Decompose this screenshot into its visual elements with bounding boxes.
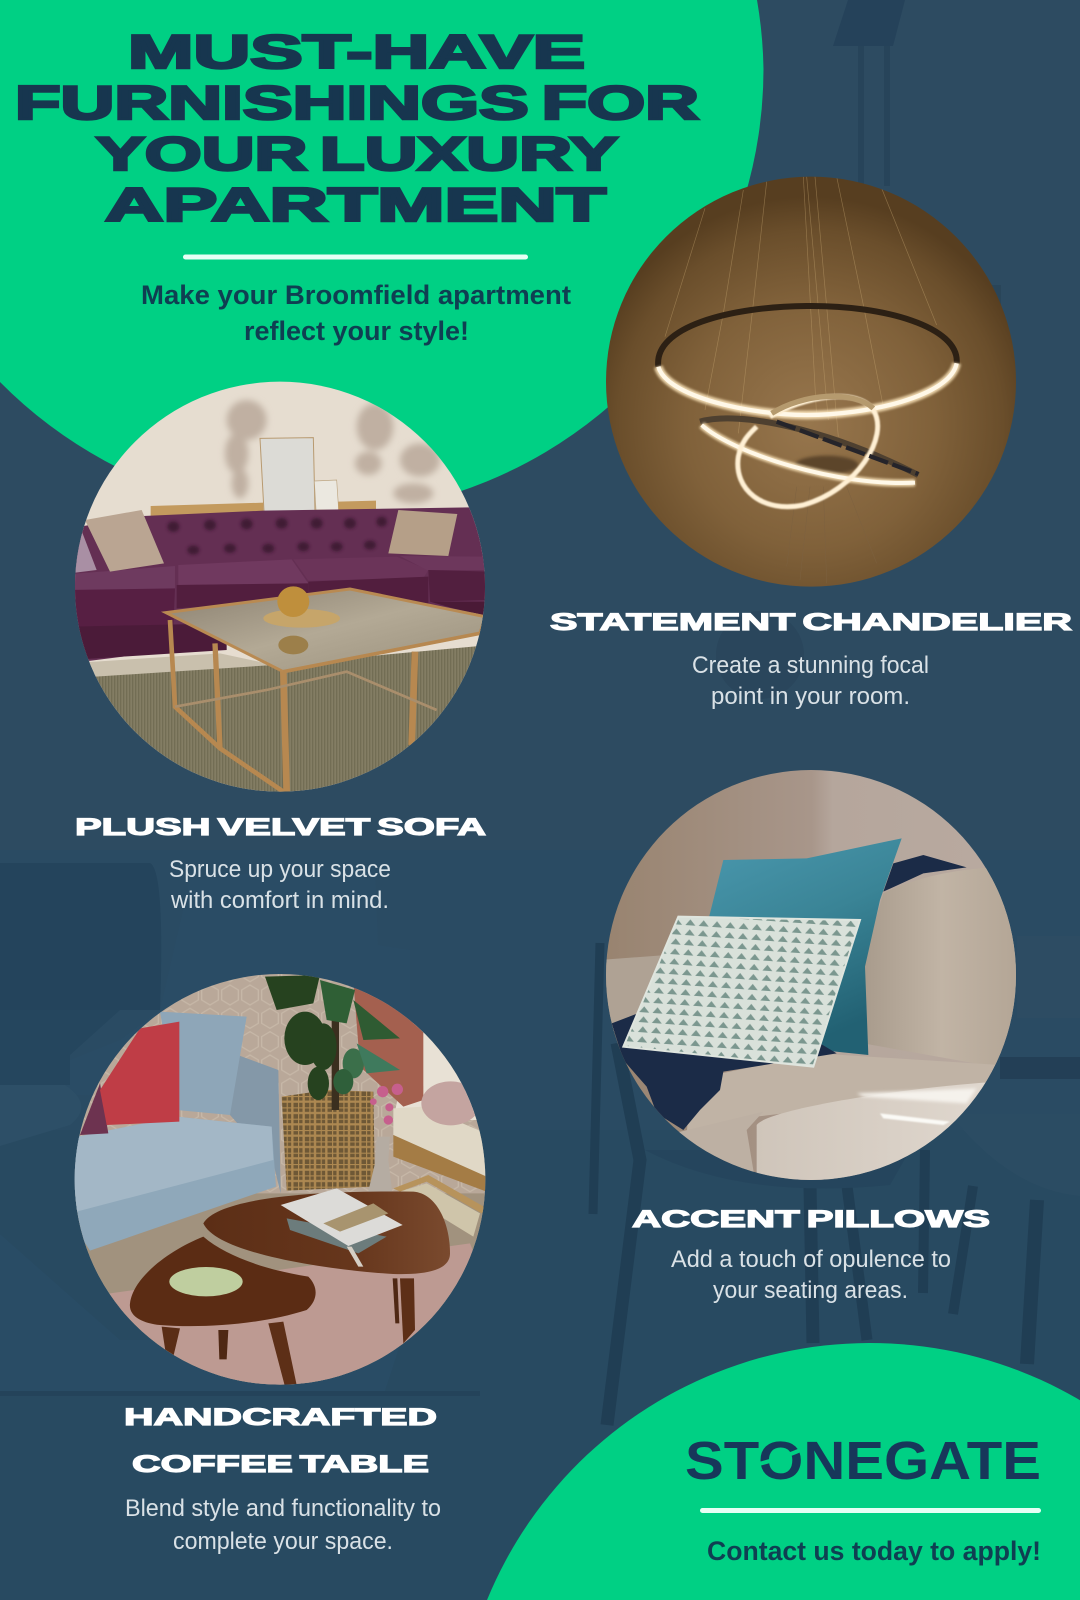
heading: plush velvet sofa: PLUSH VELVET SOFA: [75, 814, 486, 841]
throw pillows: [85, 510, 457, 572]
heading: statement chandelier: STATEMENT CHANDELIER: [550, 609, 1072, 636]
heading: handcrafted coffee table: COFFEE TABLE: [132, 1451, 429, 1478]
text: chandelier description: [692, 652, 929, 710]
woven basket: [282, 1090, 375, 1191]
patterned pillow: [623, 917, 860, 1067]
floor and rug: [90, 646, 476, 792]
title: MUST-HAVE: [128, 25, 585, 78]
panel: bottom green circle: [487, 1343, 1080, 1600]
sofa: [600, 867, 1020, 1190]
text: chandelier description: point in your room.: [711, 683, 910, 710]
lamp silhouette: [833, 0, 905, 46]
photo: handcrafted coffee table: [70, 970, 493, 1393]
rug silhouette: [0, 1234, 400, 1391]
subtitle: Make your Broomfield apartment: [141, 280, 571, 310]
title: [15, 25, 699, 231]
curtain and window: [353, 980, 490, 1237]
title: YOUR LUXURY: [96, 127, 618, 180]
title: FURNISHINGS FOR: [15, 76, 699, 129]
heading: handcrafted coffee table: [124, 1404, 437, 1478]
heading: handcrafted coffee table: HANDCRAFTED: [124, 1404, 437, 1431]
teal pillow: [707, 838, 902, 1055]
tilted ring: [738, 396, 878, 507]
title divider: [183, 254, 528, 260]
dining chairs: [593, 943, 1037, 1425]
hanging cables: [665, 177, 937, 437]
vase and flowers: [368, 1084, 403, 1192]
logo: Stonegate: STONEGATE: [685, 1431, 1041, 1491]
text: coffee table description: [125, 1495, 441, 1555]
text: pillows description: your seating areas.: [713, 1277, 908, 1304]
text: sofa description: Spruce up your space: [169, 856, 391, 883]
text: chandelier description: Create a stunning focal: [692, 652, 929, 679]
nesting tables: [130, 1191, 450, 1387]
heading: accent pillows: ACCENT PILLOWS: [632, 1206, 990, 1233]
text: sofa description: with comfort in mind.: [170, 887, 389, 914]
wall stains: [225, 400, 440, 503]
text: coffee table description: Blend style and functionality to: [125, 1495, 441, 1522]
blue sofa: [70, 1053, 281, 1251]
marble coffee table: [166, 589, 485, 792]
title: APARTMENT: [105, 178, 606, 231]
large ring: [658, 306, 957, 415]
text: sofa description: [169, 856, 391, 914]
wall art frames: [151, 438, 376, 516]
gold ornament on plate: [263, 586, 340, 654]
subtitle: reflect your style!: [244, 316, 469, 346]
green plate: [169, 1267, 243, 1296]
shadow under rings: [795, 456, 858, 474]
call to action: Contact us today to apply!: [707, 1536, 1041, 1566]
side table silhouette: [0, 1085, 81, 1146]
footer divider: [700, 1508, 1041, 1513]
photo: statement chandelier: [600, 173, 1023, 593]
subtitle: [141, 280, 571, 346]
photo: accent pillows: [600, 763, 1023, 1190]
text: pillows description: [671, 1246, 951, 1304]
middle ring: [700, 418, 918, 483]
text: pillows description: Add a touch of opulence to: [671, 1246, 951, 1273]
sofa: [70, 507, 490, 663]
text: coffee table description: complete your space.: [173, 1528, 393, 1555]
dark throw blanket: [612, 855, 967, 1130]
sofa pillows: [80, 1012, 247, 1135]
pink rug: [110, 1244, 473, 1385]
sofa silhouette: [0, 863, 161, 1010]
panel: top green circle: [0, 0, 764, 515]
plant: [265, 975, 400, 1110]
book: [281, 1188, 403, 1267]
reflective band: [777, 422, 918, 474]
photo: plush velvet sofa: [70, 377, 490, 800]
floor: [70, 1193, 490, 1390]
